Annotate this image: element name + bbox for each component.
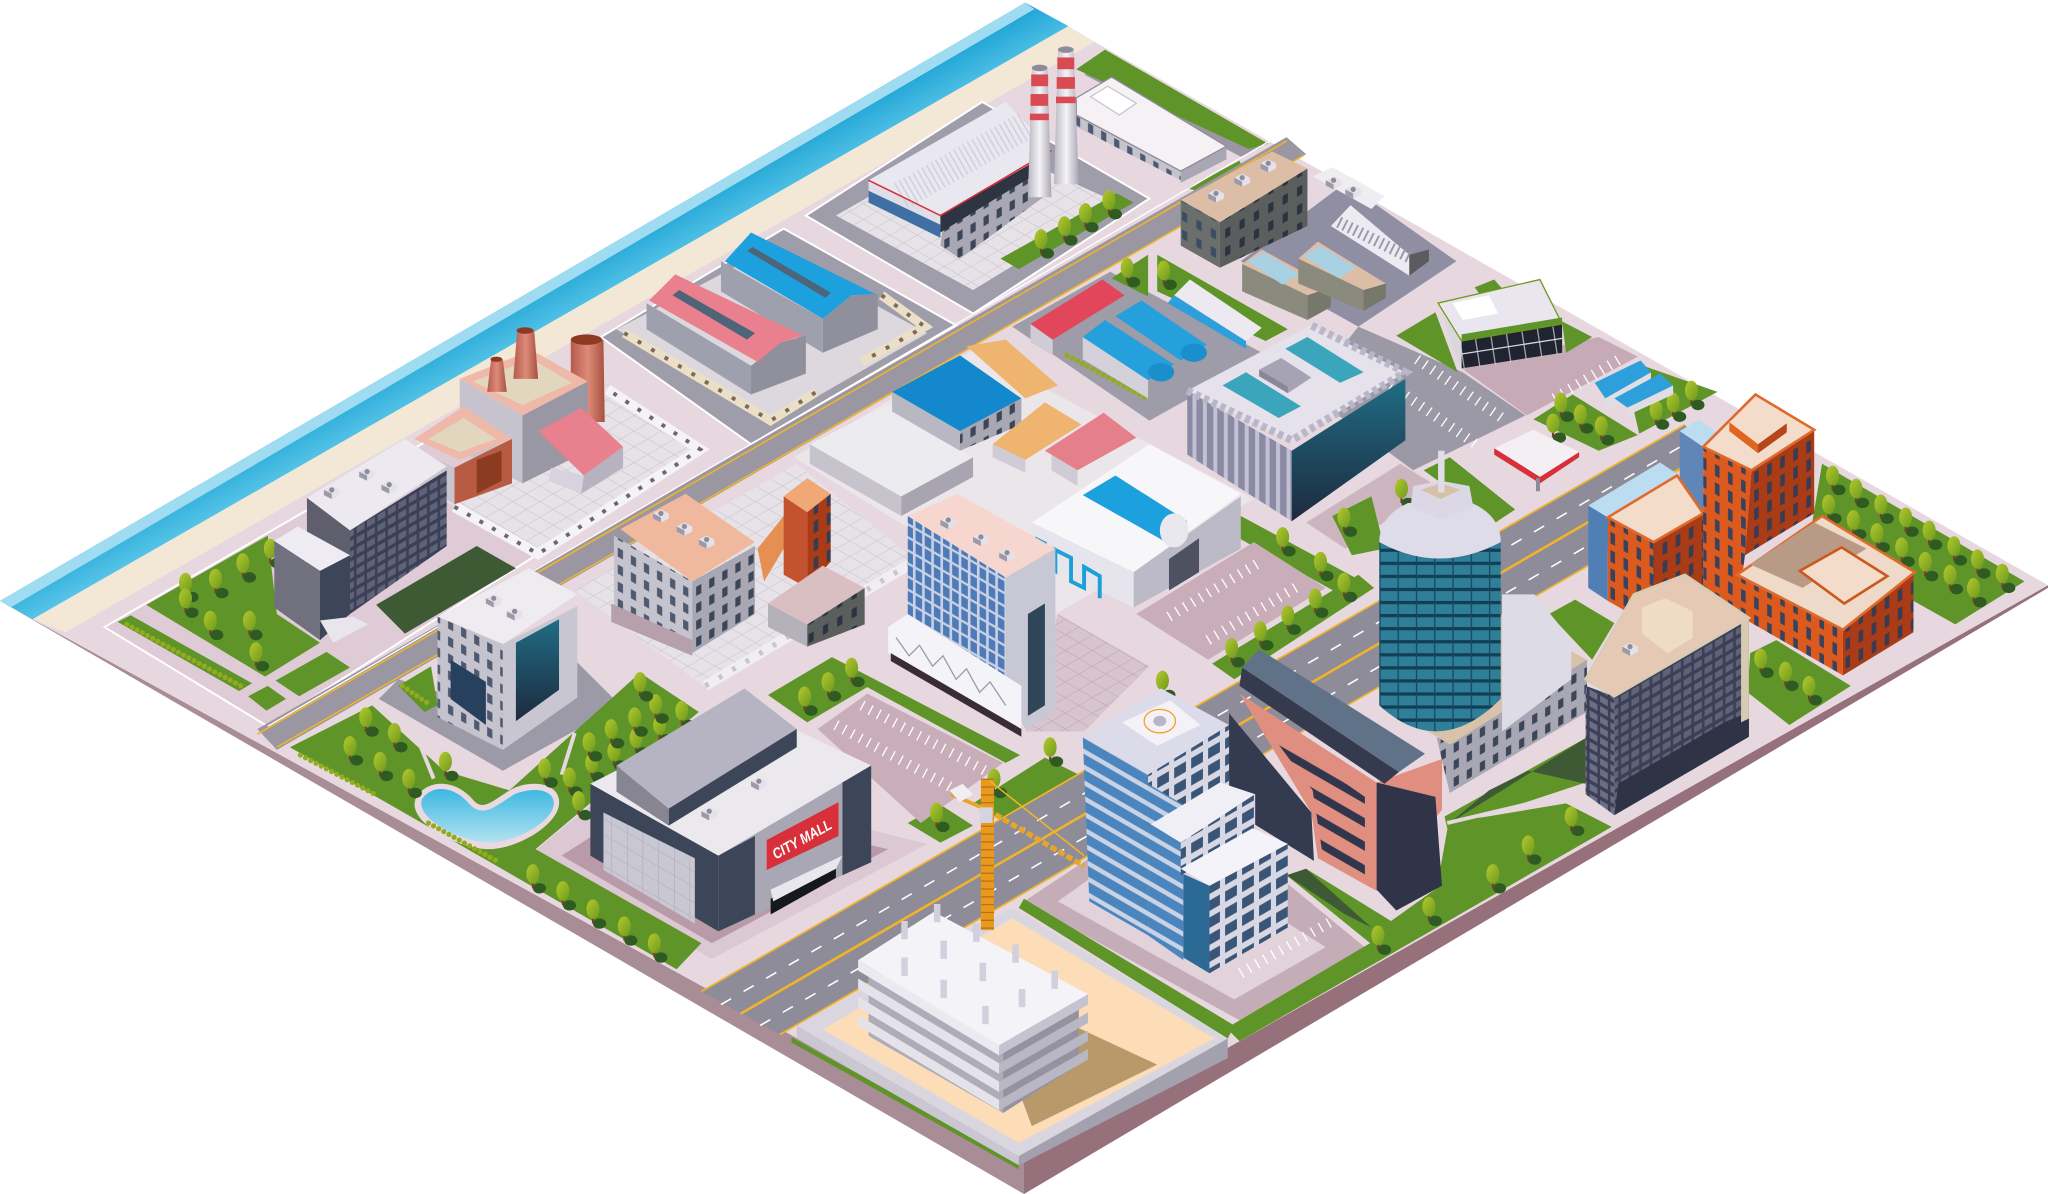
power plant warehouse and chimneys [869, 46, 1079, 259]
grey mid-rise with orange roof [611, 478, 831, 656]
pink and dark angular building [1229, 649, 1442, 911]
white warehouse with blue arch [1032, 444, 1241, 607]
trees [179, 190, 2015, 963]
ground lots and pads [104, 61, 1638, 1020]
beach sand [33, 26, 1095, 632]
lawn shadows [376, 546, 1586, 928]
sign: City Mall: CITY MALL [770, 817, 835, 863]
white and blue tall office [1083, 688, 1288, 973]
dark grey office with annex [274, 439, 447, 643]
second avenue road [701, 425, 1698, 1035]
silver office with mirrored glass [438, 568, 577, 750]
City Mall [590, 688, 871, 931]
large glass and ribbed office [1187, 325, 1405, 521]
heart pond [415, 784, 559, 849]
long white building, top [1076, 77, 1226, 183]
beige-trim dark office [1586, 575, 1749, 815]
factory fence [624, 295, 925, 421]
round glass tower with wing [1379, 451, 1587, 793]
small blue arched sheds [1595, 361, 1673, 415]
hedges [127, 355, 1147, 862]
main road [257, 132, 1306, 750]
water strip [0, 3, 1068, 619]
small brown building [768, 566, 865, 647]
terracotta power station [414, 327, 623, 504]
striped utility shed [1313, 167, 1429, 276]
orange brick complex [1588, 395, 1915, 675]
gas station [1494, 430, 1579, 491]
middle site fence [705, 562, 914, 686]
central warehouses [810, 340, 1136, 516]
sign: City Mall [767, 802, 839, 870]
power station fence [455, 389, 700, 554]
dark green office block [1181, 152, 1307, 268]
parking: by warehouse [1136, 542, 1326, 660]
park paths [414, 730, 1586, 823]
arched warehouses [1031, 280, 1262, 398]
parking: upper right [1241, 359, 1620, 973]
concrete building under construction [858, 904, 1088, 1113]
base slab side faces [0, 585, 2048, 1194]
solar roof buildings [1242, 242, 1386, 320]
white and green shop [1438, 280, 1562, 368]
construction site [797, 908, 1228, 1165]
parking: centre [818, 694, 1003, 823]
blue glass tower [888, 494, 1055, 737]
tower crane [950, 779, 1084, 930]
blue and pink factories [647, 233, 878, 395]
